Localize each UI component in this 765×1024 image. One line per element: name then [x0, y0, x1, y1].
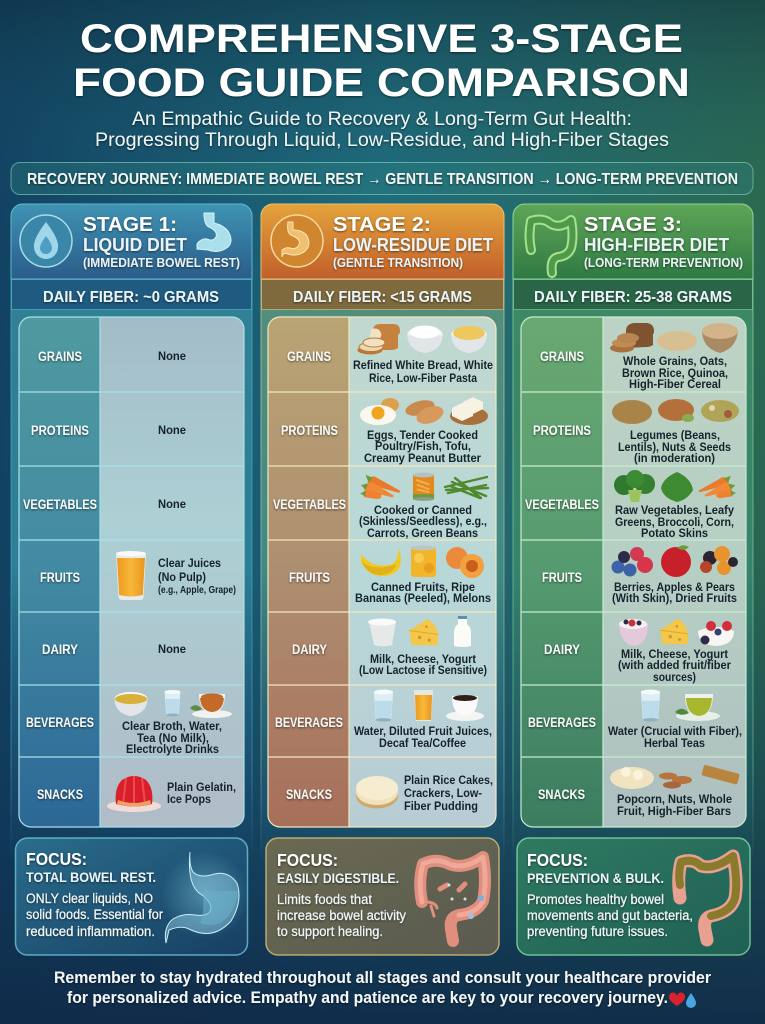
dairy text: Milk, Cheese, Yogurt [621, 647, 728, 661]
icons: fruits [612, 545, 738, 577]
none cells: None [158, 497, 186, 511]
beverages text [608, 724, 742, 750]
subtitle: Progressing Through Liquid, Low-Residue, and High-Fiber Stages [95, 129, 669, 151]
stage 2 header [261, 204, 504, 279]
focus box 2 [266, 838, 499, 955]
row labels: VEGETABLES [273, 497, 346, 512]
icons: water and herbal tea [641, 690, 720, 722]
stage 2 table [268, 317, 496, 827]
stage 3 title [584, 214, 743, 270]
beverages text: Water (Crucial with Fiber), [608, 724, 742, 738]
vegetables text [615, 503, 734, 540]
icon: stomach [197, 213, 231, 251]
panel: stage 1 [11, 204, 252, 955]
grains text: Rice, Low-Fiber Pasta [369, 371, 477, 385]
stage 3 panel body [513, 204, 753, 864]
grains text [353, 358, 493, 385]
stage 3 title: STAGE 3: [584, 214, 682, 236]
proteins text: Poultry/Fish, Tofu, [375, 439, 471, 453]
row labels: BEVERAGES [275, 715, 343, 730]
icons: snacks [610, 765, 740, 789]
snacks text: Fruit, High-Fiber Bars [617, 804, 731, 818]
focus text 3: Promotes healthy bowel [527, 892, 664, 907]
fruits text [355, 580, 491, 605]
snacks text [167, 780, 236, 806]
vegetables text: Raw Vegetables, Leafy [615, 503, 734, 517]
icon: green colon [530, 220, 572, 273]
proteins text: (in moderation) [634, 451, 715, 465]
icon: broth [115, 692, 147, 716]
stage 1 title: LIQUID DIET [83, 235, 187, 255]
row labels: BEVERAGES [26, 715, 94, 730]
snacks text: Crackers, Low- [404, 786, 482, 800]
subtitle: An Empathic Guide to Recovery & Long-Term Gut Health: [132, 108, 632, 130]
icon: heart and water drop [669, 992, 696, 1008]
snacks text: Plain Rice Cakes, [404, 773, 493, 787]
icon: gelatin [107, 776, 161, 812]
icons: fruits [361, 546, 484, 578]
panel: stage 3 [513, 204, 753, 955]
stage 1 table [19, 317, 244, 827]
grains text: Brown Rice, Quinoa, [622, 366, 728, 380]
stage 3 title: (LONG-TERM PREVENTION) [584, 255, 743, 270]
grains text: Whole Grains, Oats, [623, 354, 727, 368]
focus text 3: FOCUS: [527, 850, 588, 870]
row labels: PROTEINS [281, 423, 338, 438]
row labels: BEVERAGES [528, 715, 596, 730]
icons: beverages [374, 690, 484, 722]
subtitle [95, 108, 669, 151]
icons: dairy [368, 616, 471, 647]
panel: stage 2 [261, 204, 504, 955]
footer note [54, 969, 712, 1007]
row labels: DAIRY [544, 642, 580, 657]
stage 2 daily fiber [262, 280, 504, 310]
none cells: None [158, 642, 186, 656]
proteins text: Legumes (Beans, [630, 428, 720, 442]
stage 1 daily fiber [12, 280, 252, 310]
row labels: GRAINS [540, 349, 584, 364]
beverages text [122, 719, 222, 756]
icons: proteins [360, 397, 488, 427]
row labels: SNACKS [286, 787, 332, 802]
icon: tea [190, 694, 232, 718]
vegetables text: Cooked or Canned [374, 503, 472, 517]
icon: water drop [20, 215, 72, 267]
stage 2 title: LOW-RESIDUE DIET [333, 235, 493, 255]
grains text: Refined White Bread, White [353, 358, 493, 372]
focus text 2: increase bowel activity [277, 908, 406, 923]
row labels: DAIRY [42, 642, 78, 657]
icons: grains [358, 324, 487, 354]
icon: glass stomach [161, 851, 249, 943]
row labels: SNACKS [538, 787, 585, 802]
focus text 1: solid foods. Essential for [26, 907, 163, 922]
row labels: FRUITS [40, 570, 80, 585]
row labels [525, 349, 599, 802]
fruits text [612, 580, 737, 605]
proteins text: Creamy Peanut Butter [364, 451, 481, 465]
icons: vegetables [614, 470, 736, 502]
dairy text [618, 647, 731, 684]
grains text: High-Fiber Cereal [629, 377, 721, 391]
fruits text [158, 556, 236, 596]
focus text 3: PREVENTION & BULK. [527, 870, 664, 886]
stage 1 panel body [11, 204, 252, 864]
row labels: FRUITS [542, 570, 582, 585]
row labels: VEGETABLES [525, 497, 599, 512]
stage 3 daily fiber: DAILY FIBER: 25-38 GRAMS [534, 289, 732, 306]
icons: vegetables [360, 473, 488, 501]
stage 2 title: STAGE 2: [333, 214, 431, 236]
stage 3 daily fiber [514, 280, 752, 310]
beverages text: Herbal Teas [644, 736, 705, 750]
stage 1 daily fiber: DAILY FIBER: ~0 GRAMS [43, 289, 219, 306]
dairy text: sources) [653, 670, 696, 684]
row labels: SNACKS [37, 787, 83, 802]
icon: digestive circle [271, 215, 323, 267]
stage 3 title: HIGH-FIBER DIET [584, 235, 729, 255]
icon: water glass [165, 690, 180, 716]
stage 1 title [83, 214, 240, 270]
stage 2 daily fiber: DAILY FIBER: <15 GRAMS [293, 289, 472, 306]
stage 3 table [521, 317, 746, 827]
focus box 3 [517, 838, 750, 955]
focus text 3 [527, 850, 693, 939]
stage 1 title: STAGE 1: [83, 214, 177, 236]
snacks text: Ice Pops [167, 792, 211, 806]
fruits text: Canned Fruits, Ripe [371, 580, 475, 594]
dairy text: Milk, Cheese, Yogurt [370, 652, 476, 666]
icons: legumes and nuts [612, 399, 739, 424]
proteins text [364, 428, 481, 465]
title: COMPREHENSIVE 3-STAGE [80, 17, 683, 61]
dairy text: (Low Lactose if Sensitive) [359, 663, 487, 677]
row labels: GRAINS [38, 349, 82, 364]
beverages text: Tea (No Milk), [137, 731, 209, 745]
fruits text: Berries, Apples & Pears [614, 580, 735, 594]
row labels [23, 349, 97, 802]
focus text 2: Limits foods that [277, 892, 372, 907]
fruits text: (No Pulp) [158, 570, 206, 584]
vegetables text: Potato Skins [641, 526, 708, 540]
proteins text: Lentils), Nuts & Seeds [618, 440, 731, 454]
row labels: PROTEINS [31, 423, 89, 438]
none cells: None [158, 423, 186, 437]
icons: dairy [619, 619, 734, 646]
vegetables text: Greens, Broccoli, Corn, [615, 515, 734, 529]
focus text 1 [26, 849, 163, 939]
proteins text: Eggs, Tender Cooked [367, 428, 478, 442]
grains text [622, 354, 728, 391]
fruits text: (e.g., Apple, Grape) [158, 585, 236, 596]
stage 1 header [11, 204, 252, 279]
row labels: PROTEINS [533, 423, 591, 438]
dairy text: (with added fruit/fiber [618, 658, 731, 672]
stage 2 panel body [261, 204, 504, 864]
stage 2 title [333, 214, 493, 270]
focus text 2: EASILY DIGESTIBLE. [277, 870, 399, 886]
focus text 1: reduced inflammation. [26, 924, 155, 939]
beverages text [354, 724, 492, 750]
icon: healthy colon [679, 856, 736, 940]
title [73, 17, 690, 105]
row labels: DAIRY [292, 642, 327, 657]
row labels: VEGETABLES [23, 497, 97, 512]
focus text 1: FOCUS: [26, 849, 87, 869]
stage 1 title: (IMMEDIATE BOWEL REST) [83, 255, 240, 270]
snacks text: Popcorn, Nuts, Whole [617, 792, 732, 806]
footer note: Remember to stay hydrated throughout all stages and consult your healthcare provider [54, 969, 712, 987]
beverages text: Water, Diluted Fruit Juices, [354, 724, 492, 738]
none cells: None [158, 349, 186, 363]
focus box 1 [16, 838, 249, 955]
focus text 3: movements and gut bacteria, [527, 908, 693, 923]
focus text 2: FOCUS: [277, 850, 338, 870]
snacks text [404, 773, 493, 813]
beverages text: Decaf Tea/Coffee [379, 736, 466, 750]
icon: inflamed colon [420, 857, 485, 941]
focus text 1: ONLY clear liquids, NO [26, 891, 153, 906]
beverages text: Clear Broth, Water, [122, 719, 222, 733]
dairy text [359, 652, 487, 677]
stage 3 header [513, 204, 753, 279]
fruits text: (With Skin), Dried Fruits [612, 591, 737, 605]
row labels: GRAINS [287, 349, 331, 364]
none cells [158, 349, 186, 656]
beverages text: Electrolyte Drinks [126, 742, 219, 756]
row labels [273, 349, 346, 802]
snacks text: Plain Gelatin, [167, 780, 236, 794]
vegetables text: Carrots, Green Beans [367, 526, 478, 540]
focus text 2 [277, 850, 406, 939]
fruits text: Bananas (Peeled), Melons [355, 591, 491, 605]
icon: rice cake [356, 776, 398, 808]
footer note: for personalized advice. Empathy and patience are key to your recovery journey. [67, 989, 668, 1007]
proteins text [618, 428, 731, 465]
icons: whole grains [610, 323, 738, 353]
vegetables text: (Skinless/Seedless), e.g., [359, 514, 487, 528]
snacks text: Fiber Pudding [404, 799, 478, 813]
fruits text: Clear Juices [158, 556, 221, 570]
recovery journey banner [11, 162, 753, 194]
title: FOOD GUIDE COMPARISON [73, 61, 690, 105]
focus text 3: preventing future issues. [527, 924, 668, 939]
focus text 2: to support healing. [277, 924, 383, 939]
stage 2 title: (GENTLE TRANSITION) [333, 255, 463, 270]
vegetables text [359, 503, 487, 540]
icon: juice glass [116, 551, 146, 600]
row labels: FRUITS [289, 570, 330, 585]
snacks text [617, 792, 732, 818]
focus text 1: TOTAL BOWEL REST. [26, 869, 156, 885]
